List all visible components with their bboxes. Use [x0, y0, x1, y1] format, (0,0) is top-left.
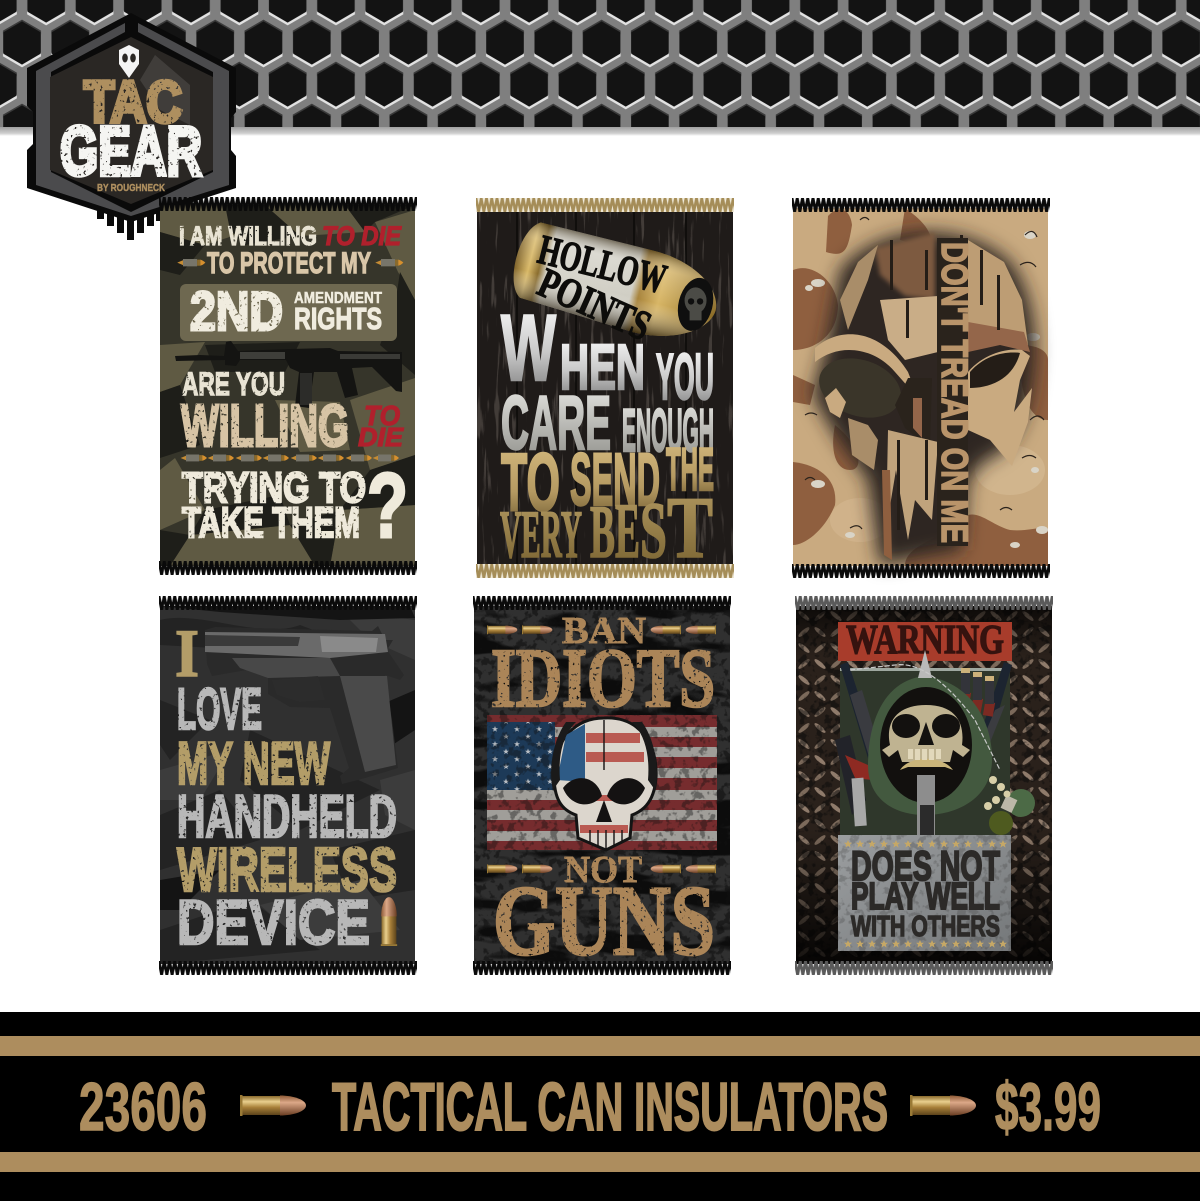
words MY NEW: MY NEW [177, 730, 330, 797]
does not: DOES NOT [851, 842, 1000, 889]
line: to die red [358, 400, 404, 452]
pistol [205, 626, 404, 784]
line: very best: T [667, 480, 713, 577]
desert camouflage [793, 208, 1048, 566]
coil bottom [159, 961, 417, 975]
word HANDHELD: HANDHELD [177, 783, 397, 850]
camouflage [160, 205, 415, 566]
bullet words: POINTS [531, 260, 657, 350]
line: trying to take them: TAKE THEM [182, 499, 360, 547]
logo teeth [97, 195, 161, 240]
bullet icon left [240, 1095, 306, 1116]
gray camouflage [160, 606, 415, 964]
rifle [175, 341, 402, 408]
grenade [984, 776, 1035, 835]
line: trying to take them [182, 455, 408, 557]
word I: I [175, 615, 199, 691]
coil top [473, 596, 731, 610]
line: I am willing to die: TO DIE [322, 221, 402, 251]
logo skull shield icon [119, 45, 139, 78]
logo byline: BY ROUGHNECK [97, 182, 165, 194]
line: very best [500, 480, 713, 577]
line: when you: W [501, 295, 556, 400]
play well: PLAY WELL [851, 876, 1000, 918]
upright bullet [381, 897, 397, 946]
line: very best: S [640, 485, 667, 575]
top bullets [487, 625, 716, 634]
metal mesh header strip [0, 0, 1200, 136]
word DEVICE: DEVICE [177, 888, 370, 958]
amendment plaque [180, 280, 397, 342]
panel 5: ban idiots not guns [473, 596, 731, 976]
steel sign [838, 835, 1011, 951]
logo word TAC: TAC [84, 70, 182, 135]
panel 2: hollow points [476, 198, 734, 578]
line: to send the [501, 436, 714, 528]
panel 4: handheld wireless device [159, 596, 417, 975]
text: ENOUGH [622, 397, 714, 464]
line: to die red: DIE [358, 422, 404, 452]
coil bottom [159, 561, 417, 575]
line: I am willing to die: I AM WILLING [179, 221, 317, 251]
hollow point skull [685, 287, 707, 320]
word IDIOTS: IDIOTS [491, 632, 715, 725]
price: $3.99 [995, 1069, 1101, 1145]
line: very best: B [590, 491, 615, 574]
spike [918, 650, 932, 678]
hood [868, 676, 992, 815]
word LOVE: LOVE [177, 677, 262, 742]
sign stars bottom [844, 940, 1007, 948]
barbed wire [850, 665, 1000, 770]
panel 3: don't tread on me skull [792, 198, 1050, 578]
line: are you: ARE YOU [182, 366, 285, 402]
with others: WITH OTHERS [851, 911, 1000, 943]
coil bottom [795, 961, 1053, 975]
panel 1: 2nd amendment rights [159, 197, 417, 575]
amendment plaque: AMENDMENT [294, 290, 382, 307]
coil bottom [792, 564, 1050, 578]
line: to protect my: TO PROTECT MY [207, 247, 371, 280]
bullet icon right [910, 1095, 976, 1116]
line: care enough: CARE [501, 381, 611, 466]
coil bottom [476, 564, 734, 578]
word WIRELESS: WIRELESS [177, 836, 397, 905]
amendment plaque: RIGHTS [294, 301, 382, 336]
word NOT: NOT [564, 849, 642, 891]
panel 2: hollow points: YOU [656, 340, 714, 413]
line: when you [501, 295, 714, 413]
line: when you: HEN [560, 331, 645, 403]
skull details [811, 232, 1032, 560]
coil bottom [473, 961, 731, 975]
weapons and shells [835, 662, 1012, 826]
panel 6: warning does not play well [795, 596, 1053, 975]
amendment plaque: 2ND [190, 280, 283, 342]
warning sign: WARNING [846, 616, 1004, 662]
bullet words: HOLLOW [534, 227, 671, 303]
line: willing: WILLING [181, 393, 349, 459]
word BAN: BAN [562, 610, 646, 652]
distressed flag [487, 715, 717, 850]
line: very best: E [615, 487, 640, 574]
coil top [792, 198, 1050, 212]
panel 2: hollow points: THE [666, 436, 714, 503]
sign stars top [844, 840, 1007, 848]
line: very best: VERY [500, 496, 582, 572]
vertical words: DON'T TREAD ON ME [934, 242, 975, 543]
coil top [159, 197, 417, 211]
line: to send the: TO [501, 437, 560, 528]
skull shadow [812, 232, 1035, 565]
line: trying to take them: TRYING TO [182, 464, 366, 512]
skull and barrel [882, 705, 970, 840]
coil top [795, 596, 1053, 610]
lower bullets [487, 864, 716, 873]
row of bullets [181, 454, 399, 461]
coil top [476, 198, 734, 212]
line: to send the: SEND [570, 438, 660, 521]
hood shadow [880, 687, 972, 803]
line: to die red: TO [364, 400, 400, 431]
footer product band [0, 1012, 1200, 1201]
bullet: hollow points [506, 219, 726, 350]
vertical column behind words [937, 238, 968, 546]
coil top [159, 596, 417, 610]
word GUNS: GUNS [493, 865, 715, 976]
green ammo box [840, 668, 1010, 838]
logo word GEAR: GEAR [60, 112, 202, 190]
bullet words [531, 227, 671, 350]
logo: Tac Gear badge [27, 13, 236, 240]
line: trying to take them: ? [367, 455, 408, 557]
item number: 23606 [79, 1069, 207, 1145]
flag skull [551, 718, 657, 850]
